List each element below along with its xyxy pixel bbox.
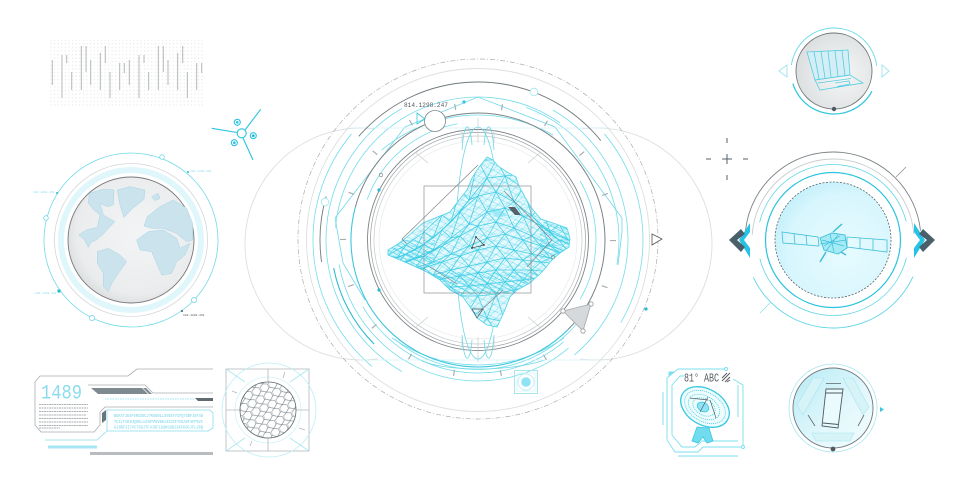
coordinate label: 814.1298.247 <box>404 102 448 109</box>
code box: TCILFIKIUQOKLcdd8TP9VB9J3I3CF7CKA8F4FP5VC <box>114 419 203 425</box>
right pointer <box>880 407 884 412</box>
wireframe mountain <box>388 158 570 326</box>
bottom lines <box>45 431 107 440</box>
left arrow <box>779 65 787 77</box>
icon: phone <box>822 389 843 428</box>
globe markers <box>44 155 197 321</box>
globe coordinates: 102.1298.291 <box>35 292 57 295</box>
icon: satellite <box>782 224 887 262</box>
circle marker <box>424 110 446 132</box>
icon: three-arm node <box>212 109 261 160</box>
right chevrons <box>914 223 935 258</box>
code box: GJ8BF3I7VCT8GJ7F4J9F1G9K99BJ2KFK3GJFLJ8Q <box>114 424 203 430</box>
dish panel <box>663 368 744 456</box>
satellite disc <box>775 182 891 298</box>
number 1489: 1489 <box>41 382 82 406</box>
satellite badge <box>716 123 950 357</box>
ticks ring <box>343 105 613 375</box>
paragraph lines <box>39 404 88 428</box>
dark bars <box>91 388 213 423</box>
phone disc <box>793 368 873 448</box>
globe coordinates <box>33 170 212 317</box>
barcode panel <box>50 40 204 108</box>
dish label: 81° ABC <box>684 372 719 386</box>
center triangle <box>471 236 485 249</box>
frame <box>663 368 744 456</box>
cyan arc rings <box>246 6 710 476</box>
globe panel <box>33 153 218 327</box>
badge disc <box>796 33 872 109</box>
right triangle marker <box>652 234 662 245</box>
globe coordinates: 102.1298.291 <box>33 191 55 194</box>
dotted line <box>105 398 195 400</box>
data card <box>35 369 213 455</box>
small arrow marker <box>417 113 425 124</box>
dark rhomb <box>508 207 521 215</box>
inner radial marks <box>415 118 541 362</box>
code box: BGKAT354F9RC58CJ7K8801L3V56F7CFQ7GBFJ5F48 <box>114 413 203 419</box>
targeting diamond <box>402 165 552 313</box>
icon: laptop <box>807 50 863 90</box>
laptop badge <box>776 13 892 129</box>
outer dashed ring <box>298 59 658 419</box>
inner rings <box>368 130 588 350</box>
hatch mark <box>722 373 730 382</box>
code box <box>107 410 213 431</box>
bottom dot <box>831 447 835 451</box>
right arrow <box>882 65 889 77</box>
lower triangle <box>472 309 483 318</box>
central radar <box>244 58 712 420</box>
phone badge <box>789 364 884 452</box>
globe coordinates: 102.1298.291 <box>190 170 212 173</box>
hex sphere <box>240 382 296 438</box>
continents <box>79 187 193 292</box>
mountain outline <box>388 157 570 327</box>
ring markers <box>321 88 648 311</box>
sphere panel <box>222 363 316 457</box>
cyan polygon frame <box>335 97 622 369</box>
targeting square <box>424 186 531 293</box>
crosshair <box>706 138 748 180</box>
lens arcs <box>230 68 725 412</box>
dark arcs <box>255 17 701 463</box>
gray triangle marker <box>561 302 593 333</box>
left chevrons <box>729 223 750 258</box>
narrow vertical ellipses <box>456 127 500 359</box>
side panels <box>797 378 869 441</box>
main ring <box>322 84 634 396</box>
target square icon <box>514 370 538 394</box>
globe coordinates: 102.1298.291 <box>183 314 205 317</box>
icon: dish antenna <box>673 378 737 443</box>
globe sphere <box>68 177 194 303</box>
